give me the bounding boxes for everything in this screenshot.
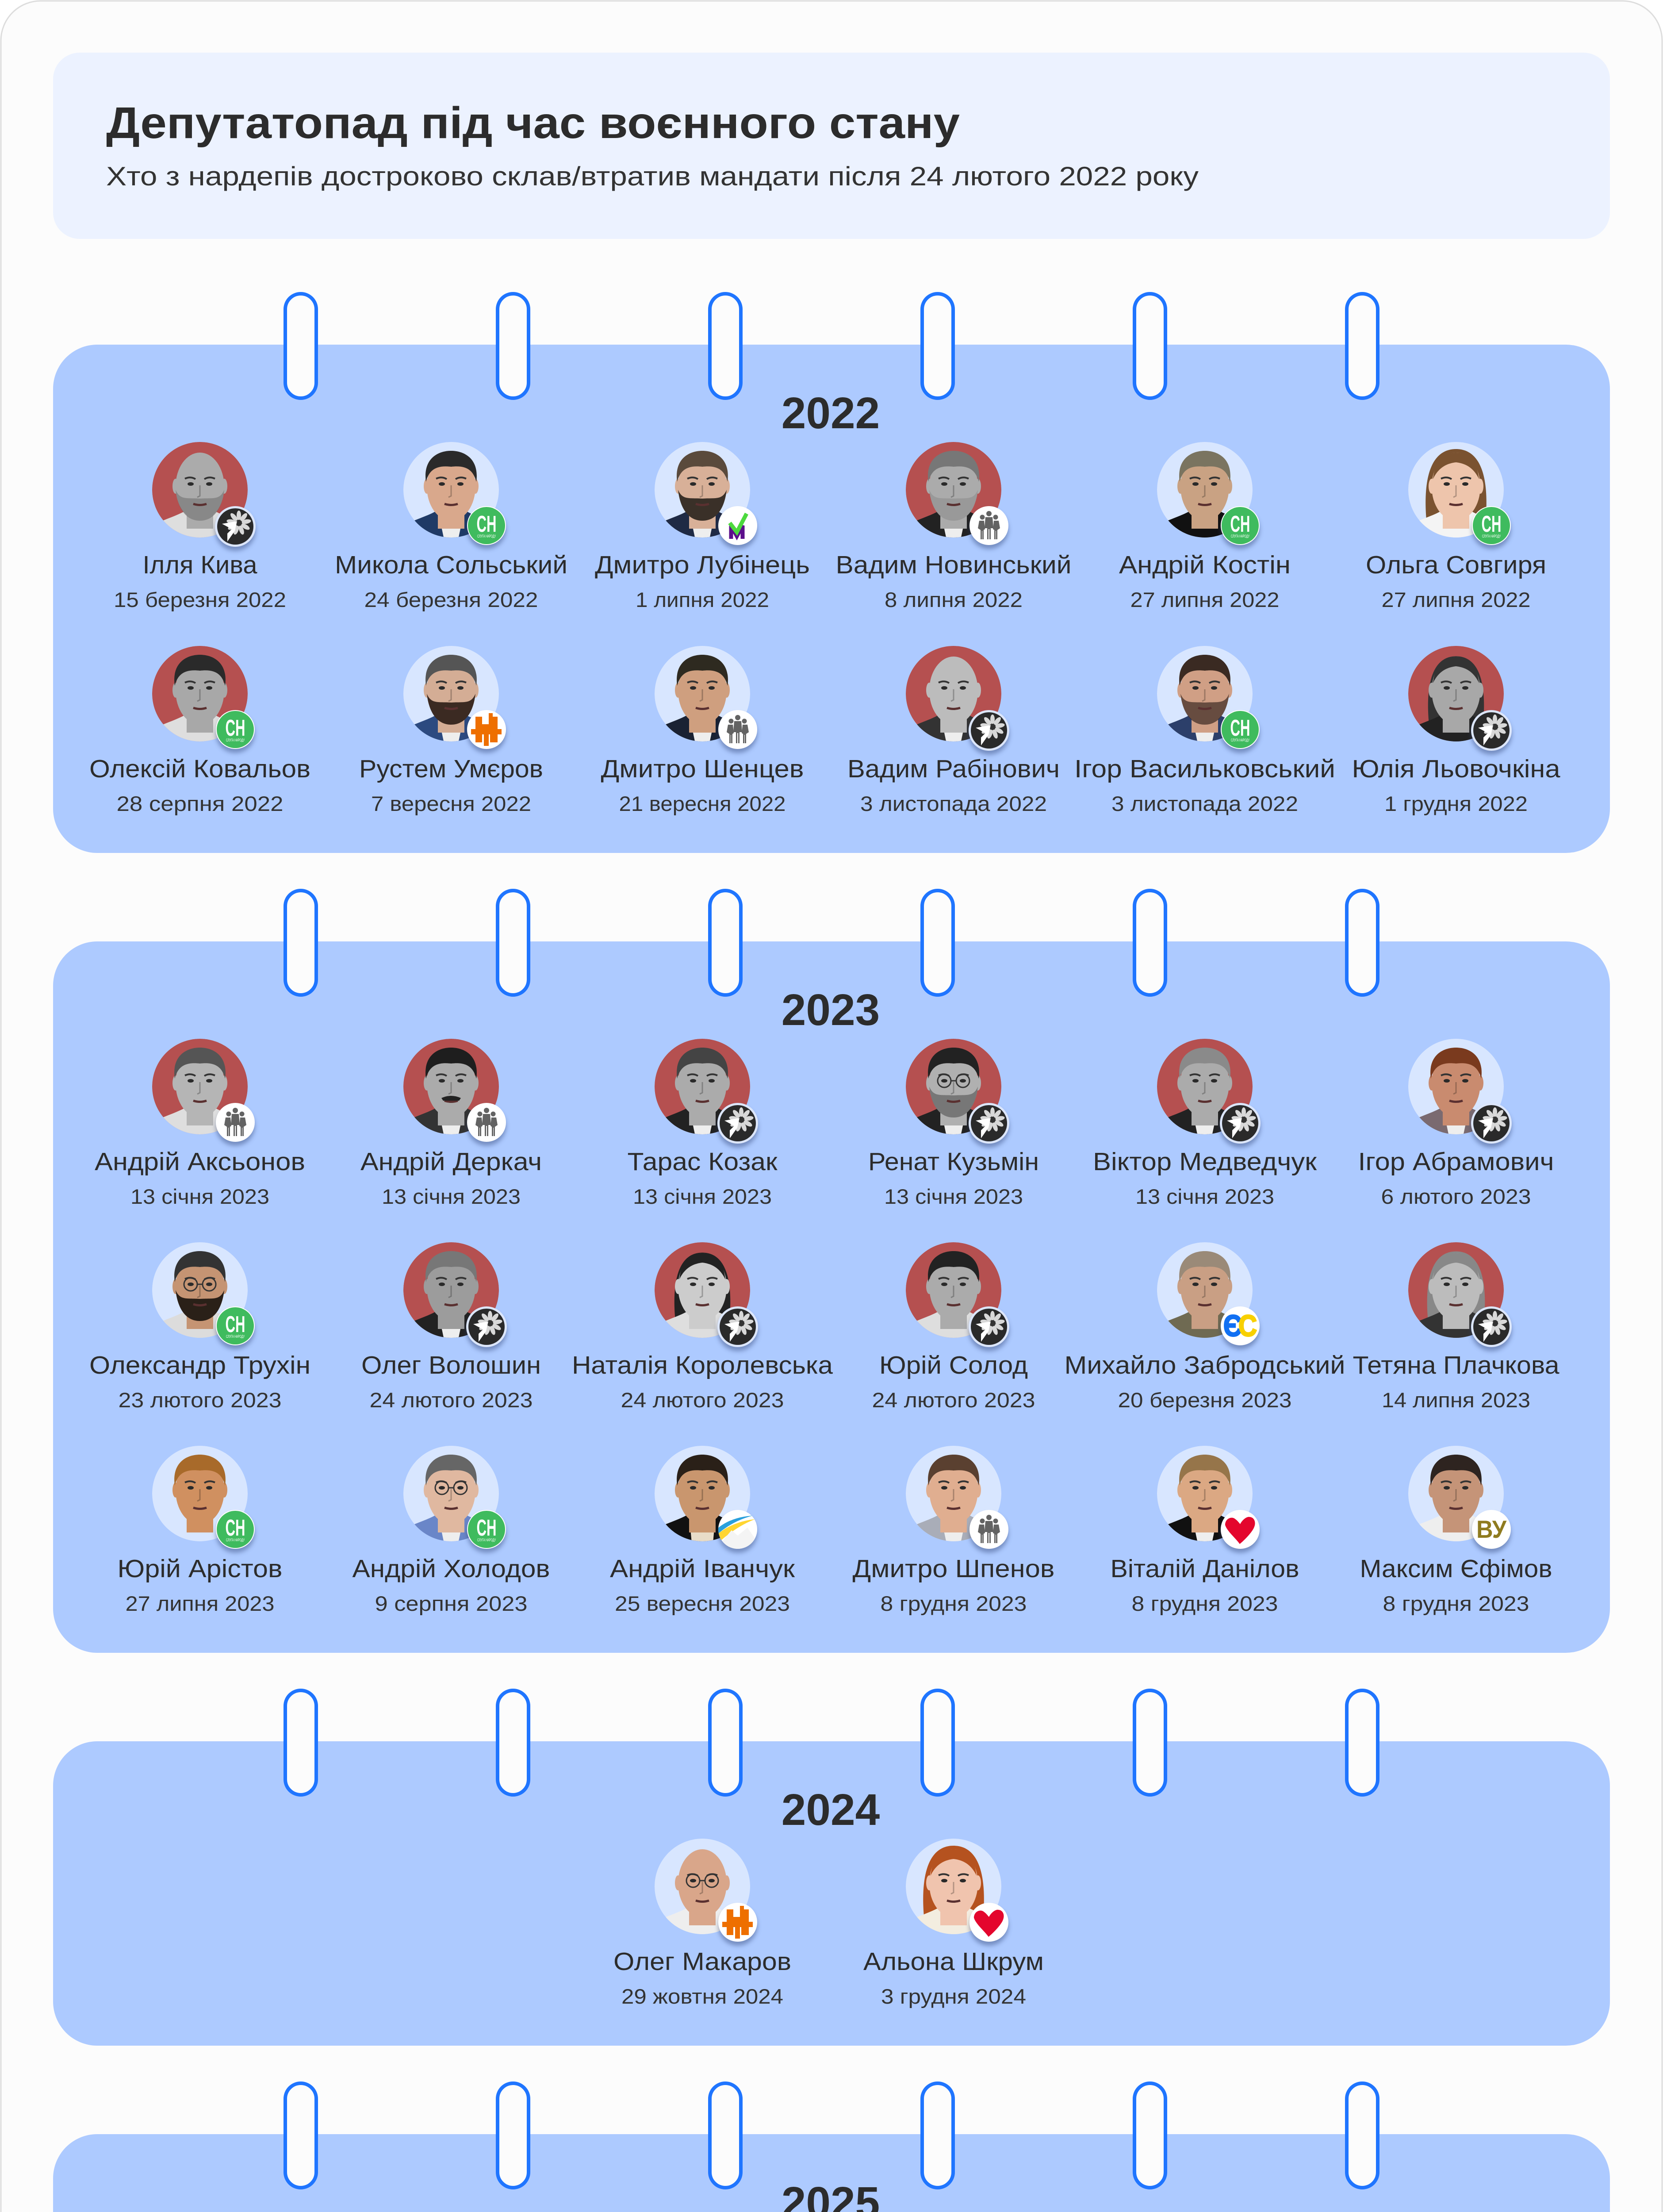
- party badge: [466, 1306, 507, 1347]
- person: Михайло Забродський: [1064, 1242, 1345, 1412]
- date: 29 жовтня 2024: [621, 1985, 783, 2008]
- panel: 2024: [53, 1690, 1610, 2046]
- date: 25 вересня 2023: [615, 1592, 790, 1615]
- party badge: Є: [1223, 1309, 1242, 1343]
- person: Тетяна Плачкова: [1353, 1242, 1560, 1412]
- name: Дмитро Шенцев: [601, 755, 804, 783]
- portrait: [152, 1242, 248, 1340]
- party badge: [718, 506, 757, 545]
- portrait: [152, 1446, 248, 1541]
- panel: 2025: [53, 2083, 1610, 2212]
- portrait: [906, 1839, 1001, 1936]
- person: Олег Макаров: [613, 1839, 791, 2008]
- portrait: [655, 1039, 750, 1136]
- party badge: СН: [477, 511, 496, 537]
- person: Ігор Васильковський: [1074, 646, 1335, 815]
- name: Віктор Медведчук: [1093, 1148, 1317, 1176]
- person: Дмитро Лубінець: [595, 442, 810, 611]
- portrait: [906, 1446, 1001, 1543]
- party badge: С: [1238, 1309, 1257, 1343]
- year heading 2024: 2024: [782, 1785, 880, 1835]
- party badge: СН: [1482, 511, 1501, 537]
- party badge: [467, 710, 506, 749]
- person: Тарас Козак: [627, 1039, 778, 1208]
- date: 27 липня 2022: [1382, 588, 1530, 611]
- portrait: [655, 442, 750, 539]
- portrait: [1157, 1039, 1253, 1136]
- name: Юрій Арістов: [118, 1555, 282, 1583]
- date: 13 січня 2023: [1135, 1185, 1274, 1208]
- portrait: [1408, 1446, 1504, 1543]
- portrait: [403, 1242, 499, 1340]
- party badge: [1221, 506, 1260, 545]
- party badge: [216, 1306, 255, 1345]
- date: 23 лютого 2023: [119, 1388, 281, 1412]
- party badge: [1471, 1306, 1512, 1347]
- person: Олексій Ковальов: [89, 646, 310, 815]
- portrait: [1157, 646, 1253, 743]
- portrait: [906, 442, 1001, 539]
- name: Вадим Новинський: [836, 551, 1071, 579]
- name: Олег Волошин: [361, 1351, 541, 1379]
- person: Рустем Умєров: [359, 646, 543, 815]
- person: Ілля Кива: [114, 442, 286, 611]
- date: 3 листопада 2022: [860, 792, 1047, 815]
- person: Андрій Костін: [1119, 442, 1291, 611]
- party badge: СЛУГА НАРОДУ: [477, 1538, 496, 1542]
- panel: 2022: [53, 294, 1610, 853]
- name: Ренат Кузьмін: [868, 1148, 1039, 1176]
- panel: 2023: [53, 891, 1610, 1653]
- portrait: [1408, 646, 1504, 743]
- name: Олександр Трухін: [89, 1351, 310, 1379]
- party badge: [1221, 1510, 1260, 1549]
- date: 13 січня 2023: [382, 1185, 521, 1208]
- person: Микола Сольський: [335, 442, 567, 611]
- party badge: [969, 1903, 1008, 1942]
- name: Ілля Кива: [142, 551, 257, 579]
- name: Альона Шкрум: [863, 1947, 1044, 1976]
- person: Альона Шкрум: [863, 1839, 1044, 2008]
- party badge: [1471, 1103, 1512, 1144]
- party badge: СЛУГА НАРОДУ: [226, 1538, 245, 1542]
- party badge: [467, 1103, 506, 1142]
- name: Ігор Абрамович: [1358, 1148, 1554, 1176]
- party badge: [216, 710, 255, 749]
- portrait: [906, 646, 1001, 743]
- binder rings 2025: [285, 2083, 1378, 2188]
- party badge: [969, 710, 1009, 751]
- name: Максим Єфімов: [1360, 1555, 1552, 1583]
- date: 1 грудня 2022: [1384, 792, 1528, 815]
- person: Олександр Трухін: [89, 1242, 310, 1412]
- party badge: СЛУГА НАРОДУ: [477, 534, 496, 538]
- date: 3 грудня 2024: [881, 1985, 1026, 2008]
- portrait: [403, 646, 499, 743]
- party badge: [717, 1103, 758, 1144]
- title: Депутатопад під час воєнного стану: [106, 98, 960, 148]
- person: Ігор Абрамович: [1358, 1039, 1554, 1208]
- name: Дмитро Лубінець: [595, 551, 810, 579]
- party badge: СЛУГА НАРОДУ: [226, 738, 245, 742]
- party badge: СН: [1230, 511, 1250, 537]
- party badge: СН: [226, 1312, 245, 1337]
- party badge: [216, 1510, 255, 1549]
- date: 13 січня 2023: [130, 1185, 269, 1208]
- person: Дмитро Шпенов: [853, 1446, 1054, 1615]
- party badge: [1221, 1306, 1260, 1345]
- person: Вадим Рабінович: [847, 646, 1060, 815]
- name: Юлія Льовочкіна: [1352, 755, 1560, 783]
- portrait: [403, 442, 499, 539]
- date: 1 липня 2022: [636, 588, 769, 611]
- party badge: [215, 506, 256, 547]
- binder rings 2023: [285, 891, 1378, 995]
- header panel: [53, 53, 1610, 239]
- party badge: СН: [1230, 715, 1250, 741]
- person: Андрій Аксьонов: [95, 1039, 305, 1208]
- party badge: [718, 710, 757, 749]
- portrait: [1408, 1242, 1504, 1340]
- portrait: [403, 1446, 499, 1543]
- person: Юрій Арістов: [118, 1446, 282, 1615]
- date: 7 вересня 2022: [371, 792, 531, 815]
- date: 13 січня 2023: [633, 1185, 772, 1208]
- name: Вадим Рабінович: [847, 755, 1060, 783]
- name: Микола Сольський: [335, 551, 567, 579]
- person: Віталій Данілов: [1110, 1446, 1299, 1615]
- name: Рустем Умєров: [359, 755, 543, 783]
- binder rings 2022: [285, 294, 1378, 398]
- person: Ольга Совгиря: [1366, 442, 1546, 611]
- party badge: [467, 1510, 506, 1549]
- party badge: СН: [226, 1515, 245, 1541]
- portrait: [403, 1039, 499, 1136]
- portrait: [655, 1242, 750, 1340]
- name: Андрій Холодов: [352, 1555, 550, 1583]
- party badge: [1472, 506, 1511, 545]
- person: Юлія Льовочкіна: [1352, 646, 1560, 815]
- date: 8 грудня 2023: [1131, 1592, 1278, 1615]
- person: Андрій Деркач: [360, 1039, 542, 1208]
- portrait: [655, 646, 750, 743]
- binder rings 2024: [285, 1690, 1378, 1795]
- portrait: [655, 1839, 750, 1936]
- person: Юрій Солод: [872, 1242, 1035, 1412]
- name: Андрій Аксьонов: [95, 1148, 305, 1176]
- date: 24 лютого 2023: [370, 1388, 533, 1412]
- person: Ренат Кузьмін: [868, 1039, 1039, 1208]
- date: 9 серпня 2023: [375, 1592, 527, 1615]
- party badge: [1472, 1510, 1511, 1549]
- date: 28 серпня 2022: [117, 792, 283, 815]
- person: Максим Єфімов: [1360, 1446, 1552, 1615]
- date: 24 березня 2022: [364, 588, 538, 611]
- date: 20 березня 2023: [1118, 1388, 1291, 1412]
- party badge: СН: [477, 1515, 496, 1541]
- party badge: СЛУГА НАРОДУ: [226, 1334, 245, 1339]
- date: 21 вересня 2022: [619, 792, 786, 815]
- name: Михайло Забродський: [1064, 1351, 1345, 1379]
- name: Віталій Данілов: [1110, 1555, 1299, 1583]
- party badge: СН: [226, 715, 245, 741]
- name: Тетяна Плачкова: [1353, 1351, 1560, 1379]
- party badge: [969, 1306, 1009, 1347]
- party badge: [969, 506, 1008, 545]
- date: 6 лютого 2023: [1381, 1185, 1531, 1208]
- date: 14 липня 2023: [1382, 1388, 1530, 1412]
- year heading 2023: 2023: [782, 985, 880, 1035]
- party badge: [1221, 710, 1260, 749]
- name: Ольга Совгиря: [1366, 551, 1546, 579]
- portrait: [906, 1039, 1001, 1136]
- date: 8 грудня 2023: [880, 1592, 1027, 1615]
- name: Андрій Іванчук: [610, 1555, 795, 1583]
- name: Олексій Ковальов: [89, 755, 310, 783]
- portrait: [152, 1039, 248, 1136]
- name: Тарас Козак: [627, 1148, 778, 1176]
- date: 24 лютого 2023: [872, 1388, 1035, 1412]
- party badge: [467, 506, 506, 545]
- portrait: [655, 1446, 750, 1543]
- name: Юрій Солод: [879, 1351, 1028, 1379]
- party badge: СЛУГА НАРОДУ: [1231, 738, 1249, 742]
- name: Андрій Деркач: [360, 1148, 542, 1176]
- year heading 2022: 2022: [782, 388, 880, 438]
- party badge: [1471, 710, 1512, 751]
- portrait: [906, 1242, 1001, 1340]
- subtitle: Хто з нардепів достроково склав/втратив мандати після 24 лютого 2022 року: [106, 161, 1199, 191]
- date: 27 липня 2023: [126, 1592, 274, 1615]
- person: Вадим Новинський: [836, 442, 1071, 611]
- portrait: [152, 646, 248, 743]
- person: Наталія Королевська: [572, 1242, 833, 1412]
- party badge: [717, 1306, 758, 1347]
- date: 3 листопада 2022: [1111, 792, 1298, 815]
- portrait: [1157, 442, 1253, 539]
- name: Олег Макаров: [613, 1947, 791, 1976]
- name: Ігор Васильковський: [1074, 755, 1335, 783]
- portrait: [152, 442, 248, 539]
- party badge: [1220, 1103, 1261, 1144]
- name: Андрій Костін: [1119, 551, 1291, 579]
- party badge: [969, 1510, 1008, 1549]
- party badge: СЛУГА НАРОДУ: [1231, 534, 1249, 538]
- portrait: [1408, 1039, 1504, 1136]
- person: Віктор Медведчук: [1093, 1039, 1317, 1208]
- portrait: [1408, 442, 1504, 539]
- portrait: [1157, 1446, 1253, 1543]
- name: Наталія Королевська: [572, 1351, 833, 1379]
- date: 13 січня 2023: [884, 1185, 1023, 1208]
- party badge: СЛУГА НАРОДУ: [1482, 534, 1501, 538]
- date: 8 липня 2022: [885, 588, 1023, 611]
- date: 15 березня 2022: [114, 588, 286, 611]
- party badge: [216, 1103, 255, 1142]
- person: Андрій Холодов: [352, 1446, 550, 1615]
- party badge: [969, 1103, 1009, 1144]
- name: Дмитро Шпенов: [853, 1555, 1054, 1583]
- party badge: ВУ: [1476, 1515, 1507, 1543]
- party badge: [718, 1903, 757, 1942]
- date: 8 грудня 2023: [1383, 1592, 1529, 1615]
- date: 24 лютого 2023: [621, 1388, 784, 1412]
- date: 27 липня 2022: [1130, 588, 1279, 611]
- party badge: [717, 1510, 757, 1551]
- person: Олег Волошин: [361, 1242, 541, 1412]
- person: Дмитро Шенцев: [601, 646, 804, 815]
- person: Андрій Іванчук: [610, 1446, 795, 1615]
- portrait: [1157, 1242, 1253, 1340]
